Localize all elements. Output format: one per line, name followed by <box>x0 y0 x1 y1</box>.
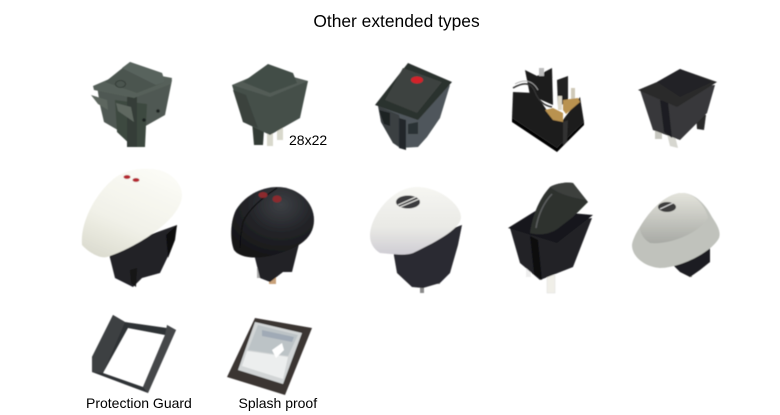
switch: green rocker with O/I marks <box>91 62 172 147</box>
switch: black rocker with red lamp <box>375 63 452 150</box>
switch: open black terminal body <box>512 68 584 152</box>
switch: tall black rocker <box>508 183 593 293</box>
switch: grey dome with logo <box>632 193 720 277</box>
logo <box>396 196 420 208</box>
label: Splash proof: Splash proof <box>238 395 317 411</box>
logo <box>658 202 676 212</box>
protection guard <box>92 315 176 393</box>
switch: black dome with red lamps <box>231 187 314 284</box>
label: 28x22: 28x22 <box>289 132 327 148</box>
switch: black double body <box>638 69 717 148</box>
switch: white oval cap with red lamps <box>82 169 182 287</box>
label: Protection Guard: Protection Guard <box>86 395 192 411</box>
switch: white dome with logo <box>370 187 462 293</box>
title: Other extended types <box>313 11 480 31</box>
red lamp <box>411 76 423 84</box>
red lamps <box>124 175 140 182</box>
red lamps <box>258 192 282 202</box>
switch: 28x22 rocker <box>232 64 308 146</box>
splash proof cover <box>227 318 312 395</box>
